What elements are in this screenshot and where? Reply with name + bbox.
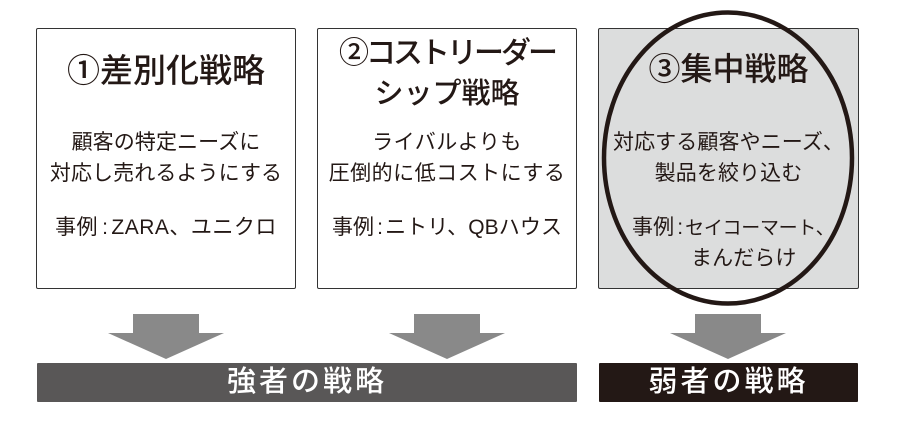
- panel: focus strategy: [598, 28, 859, 289]
- bar: strategy of the strong: 強者の戦略: [227, 366, 387, 398]
- text: description: 対応する顧客やニーズ、: [613, 131, 844, 154]
- text: description: [329, 131, 565, 185]
- text: description: [50, 130, 282, 185]
- text: examples: 事例:ニトリ、QBハウス: [332, 216, 562, 239]
- text: description: 対応し売れるようにする: [50, 162, 282, 185]
- panel: differentiation strategy: [36, 28, 296, 289]
- text: description: 圧倒的に低コストにする: [329, 162, 565, 185]
- text: examples second line: まんだらけ: [691, 247, 796, 270]
- bar: strategy of the weak: [599, 363, 858, 402]
- heading: cost leadership strategy line one: ②コストリーダー: [339, 37, 555, 70]
- text: examples: 事例:ZARA、ユニクロ: [55, 216, 277, 239]
- text: examples: 事例:セイコーマート、: [632, 216, 834, 239]
- text: description: ライバルよりも: [372, 131, 522, 154]
- text: description: 顧客の特定ニーズに: [72, 131, 260, 154]
- panel: cost leadership strategy: [317, 28, 577, 289]
- heading: focus strategy: ③集中戦略: [648, 51, 808, 87]
- heading: differentiation strategy: ①差別化戦略: [67, 52, 265, 89]
- text: description: 製品を絞り込む: [655, 162, 802, 185]
- bar: strategy of the strong: [37, 363, 577, 402]
- heading: cost leadership strategy line two: シップ戦略: [374, 78, 520, 110]
- text: description: [613, 130, 844, 185]
- bar: strategy of the weak: 弱者の戦略: [648, 366, 808, 398]
